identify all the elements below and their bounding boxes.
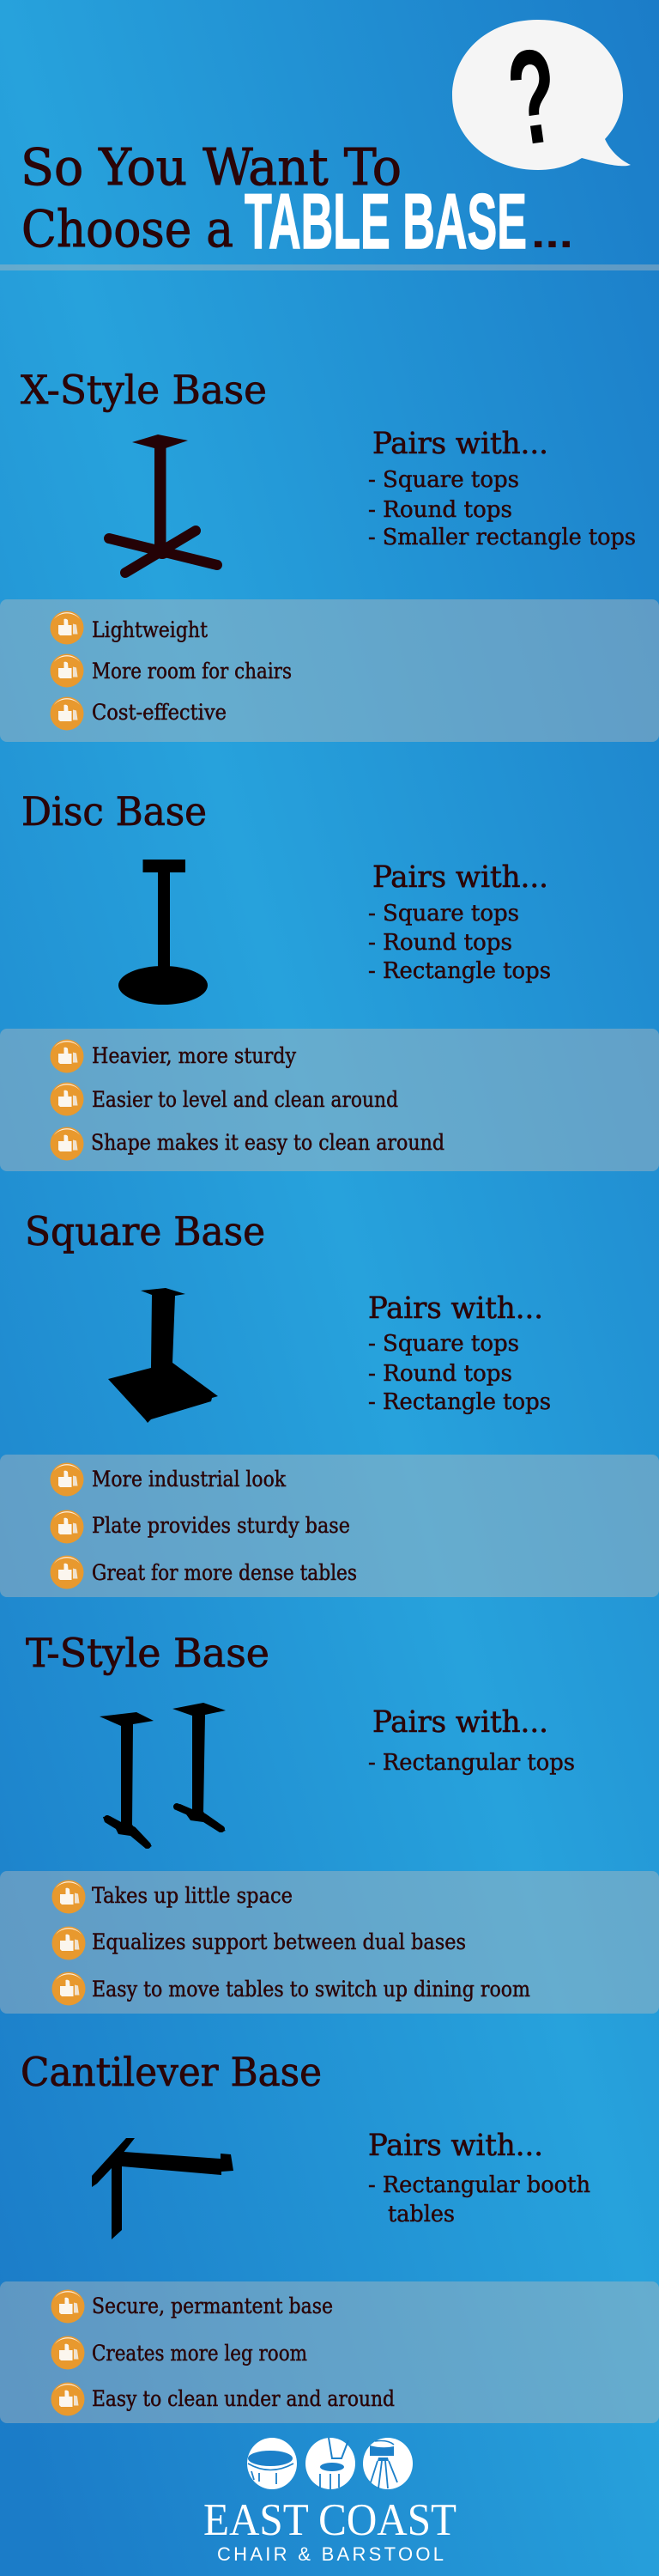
pairs with list	[368, 2129, 590, 2227]
benefit: cost-effective	[50, 697, 227, 730]
wordmark: East Coast: EAST COAST	[203, 2495, 456, 2545]
benefit: plate	[50, 1510, 350, 1544]
benefit: easy to clean	[51, 2382, 395, 2416]
benefit: secure	[51, 2289, 333, 2324]
section: Cantilever Base	[0, 2049, 659, 2423]
panel: t-style benefits	[0, 1871, 659, 2014]
benefit: easier to level	[50, 1082, 398, 1116]
benefit: more room: More room for chairs	[92, 659, 292, 683]
pairs with list: Pairs with...	[368, 2129, 543, 2163]
section: Square Base	[0, 1208, 659, 1597]
panel: disc benefits	[0, 1029, 659, 1171]
title: Choose a	[21, 199, 233, 258]
pairs with list: - Rectangular booth	[368, 2172, 590, 2198]
benefit: equalizes support	[51, 1927, 466, 1959]
benefit: heavier	[50, 1039, 296, 1073]
pairs with list: - Square tops	[368, 901, 519, 927]
pairs with list: tables	[388, 2202, 455, 2227]
pairs with list: Pairs with...	[372, 860, 548, 895]
pairs with list	[368, 860, 551, 984]
pairs with list: - Rectangular tops	[368, 1750, 575, 1776]
icon: chair	[305, 2438, 355, 2489]
panel: cantilever benefits	[0, 2281, 659, 2423]
benefit: secure: Secure, permantent base	[92, 2293, 333, 2318]
section: Disc Base	[0, 788, 659, 1171]
pairs with list: - Round tops	[368, 497, 512, 523]
benefit: dense tables	[50, 1556, 357, 1589]
icon: x-style table base	[109, 434, 217, 573]
heading: Square Base: Square Base	[25, 1208, 265, 1255]
pairs with list: - Rectangle tops	[368, 1389, 551, 1415]
heading: Disc Base: Disc Base	[21, 788, 207, 835]
title: ...	[531, 211, 573, 257]
heading: X-Style Base: X-Style Base	[21, 367, 267, 413]
benefit: heavier: Heavier, more sturdy	[92, 1043, 296, 1068]
heading: Cantilever Base: Cantilever Base	[21, 2049, 322, 2095]
pairs with list	[368, 1291, 551, 1415]
pairs with list: - Square tops	[368, 1331, 519, 1357]
pairs with list: Pairs with...	[368, 1291, 543, 1326]
heading: T-Style Base: T-Style Base	[26, 1630, 269, 1676]
pairs with list	[368, 1705, 575, 1776]
benefit: easier to level: Easier to level and clean around	[92, 1087, 398, 1112]
pairs with list: - Smaller rectangle tops	[368, 525, 636, 550]
section: T-Style Base	[0, 1630, 659, 2014]
panel: x-style benefits	[0, 599, 659, 742]
benefit: shape	[50, 1127, 444, 1161]
benefit: dense tables: Great for more dense tables	[92, 1560, 357, 1585]
logo: East Coast Chair & Barstool	[203, 2438, 456, 2565]
benefit: industrial: More industrial look	[92, 1467, 286, 1492]
benefit: equalizes support: Equalizes support between dual bases	[92, 1929, 466, 1954]
icon: cantilever table base	[92, 2138, 233, 2239]
benefit: cost-effective: Cost-effective	[92, 700, 227, 725]
speech bubble with question mark: ?	[499, 21, 567, 175]
section: X-Style Base	[0, 367, 659, 742]
icon: disc table base	[118, 860, 208, 1005]
pairs with list: - Rectangle tops	[368, 958, 551, 984]
pairs with list	[368, 427, 636, 550]
benefit: industrial	[50, 1463, 286, 1496]
title	[21, 137, 573, 265]
benefit: little space: Takes up little space	[92, 1883, 293, 1908]
panel: square benefits	[0, 1455, 659, 1597]
benefit: more room	[50, 654, 292, 687]
title: So You Want To	[21, 137, 402, 197]
benefit: lightweight	[50, 611, 208, 644]
benefit: easy to move: Easy to move tables to switch up dining room	[92, 1977, 530, 2002]
wordmark: Chair & Barstool: CHAIR & BARSTOOL	[217, 2543, 444, 2565]
benefit: plate: Plate provides sturdy base	[92, 1513, 350, 1538]
icon: stool	[363, 2438, 413, 2489]
pairs with list: - Square tops	[368, 467, 519, 493]
benefit: easy to clean: Easy to clean under and around	[92, 2386, 395, 2411]
pairs with list: Pairs with...	[372, 427, 548, 461]
pairs with list: Pairs with...	[372, 1705, 548, 1740]
benefit: leg room: Creates more leg room	[92, 2341, 307, 2366]
benefit: leg room	[51, 2336, 307, 2370]
icon: square table base	[108, 1288, 218, 1423]
benefit: lightweight: Lightweight	[92, 617, 208, 642]
pairs with list: - Round tops	[368, 930, 512, 956]
icon: table	[247, 2438, 297, 2489]
benefit: little space	[51, 1880, 293, 1913]
speech bubble with question mark	[452, 20, 631, 175]
icon: t-style table bases	[100, 1703, 226, 1849]
benefit: shape: Shape makes it easy to clean around	[91, 1130, 444, 1155]
pairs with list: - Round tops	[368, 1361, 512, 1387]
benefit: easy to move	[51, 1971, 530, 2006]
